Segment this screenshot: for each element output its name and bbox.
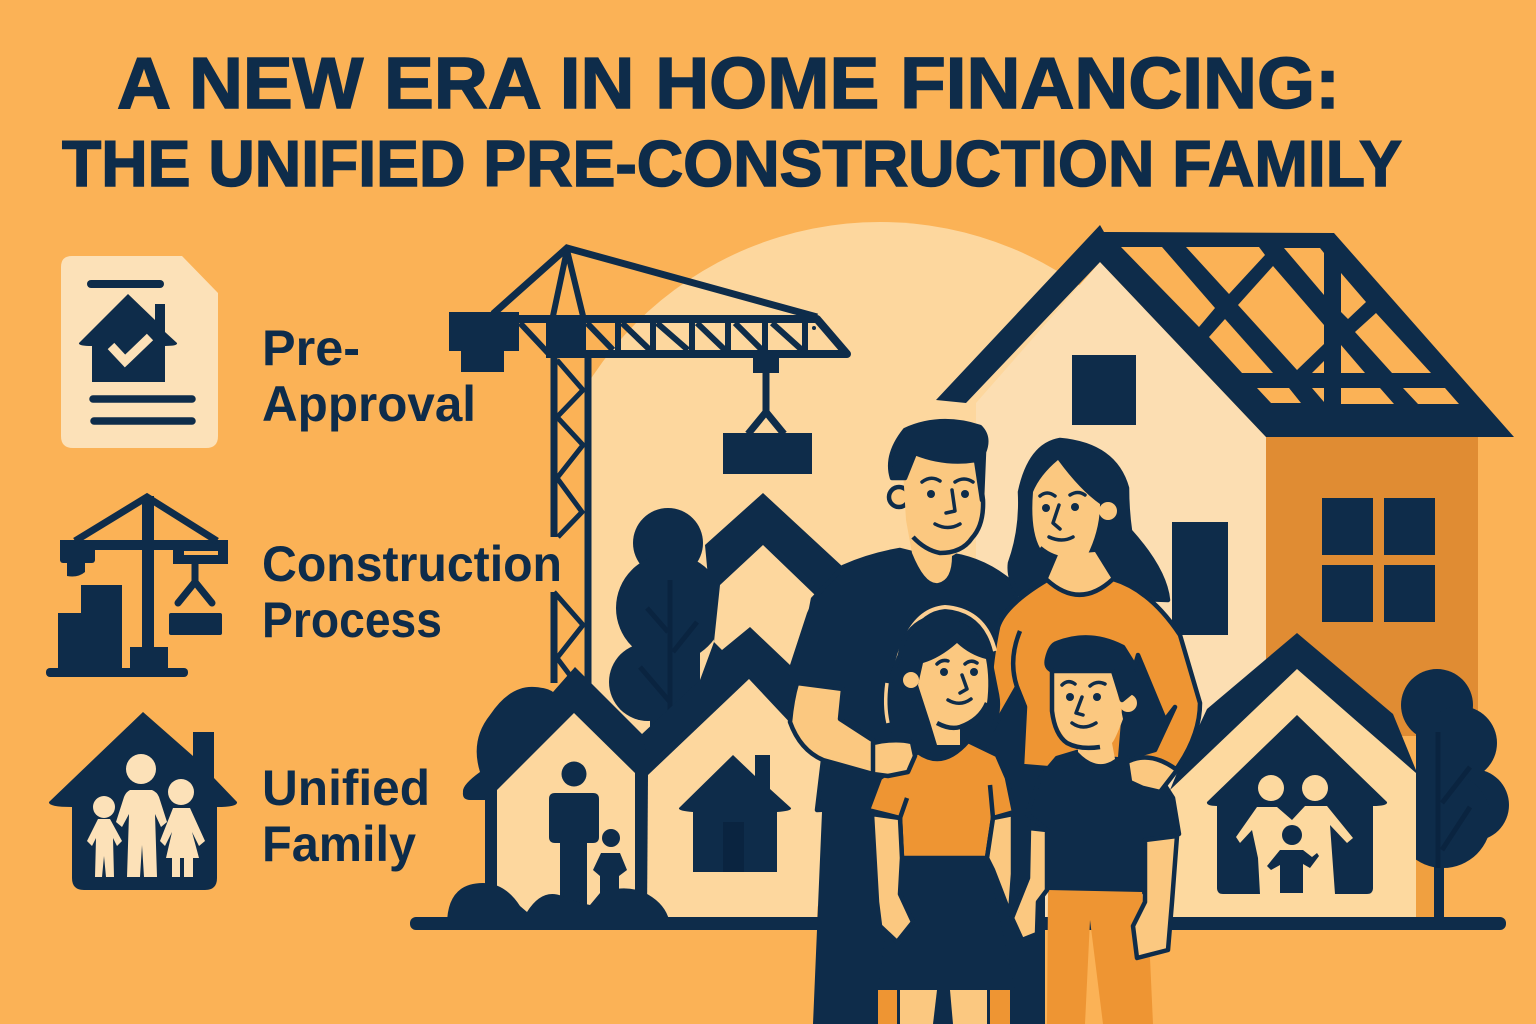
label: pre-approval <box>262 320 476 432</box>
title <box>62 44 1402 200</box>
icon: unified family house <box>49 712 237 890</box>
right small house with family <box>1170 633 1420 917</box>
label: construction process <box>262 536 562 648</box>
family: father <box>790 421 1045 1024</box>
label: unified family: Family <box>262 816 416 872</box>
large house under construction <box>936 225 1514 920</box>
tower crane <box>449 248 847 690</box>
person silhouette <box>549 762 627 905</box>
title: THE UNIFIED PRE-CONSTRUCTION FAMILY <box>62 127 1402 200</box>
roof framing <box>936 225 1514 437</box>
window <box>1322 498 1435 622</box>
label: pre-approval: Approval <box>262 376 476 432</box>
label: construction process: Construction <box>262 536 562 592</box>
sun backdrop <box>592 222 1080 906</box>
family: mother's hand <box>1127 758 1177 792</box>
label: unified family: Unified <box>262 760 430 816</box>
family: father's hand <box>873 740 915 776</box>
background tree <box>609 508 724 730</box>
background house roof <box>642 493 850 800</box>
left small house with figures <box>463 667 648 917</box>
middle small house <box>647 679 825 917</box>
family: daughter <box>868 607 1015 1024</box>
right tree <box>1395 669 1509 918</box>
title: A NEW ERA IN HOME FINANCING: <box>117 44 1340 124</box>
icon: construction crane <box>46 496 228 677</box>
label: pre-approval: Pre- <box>262 320 360 376</box>
label: construction process: Process <box>262 592 442 648</box>
family: son <box>1012 637 1179 1024</box>
ground with shrubs <box>410 883 1506 930</box>
icon: pre-approval document <box>61 256 218 448</box>
family: mother <box>990 440 1200 775</box>
label: unified family <box>262 760 430 872</box>
